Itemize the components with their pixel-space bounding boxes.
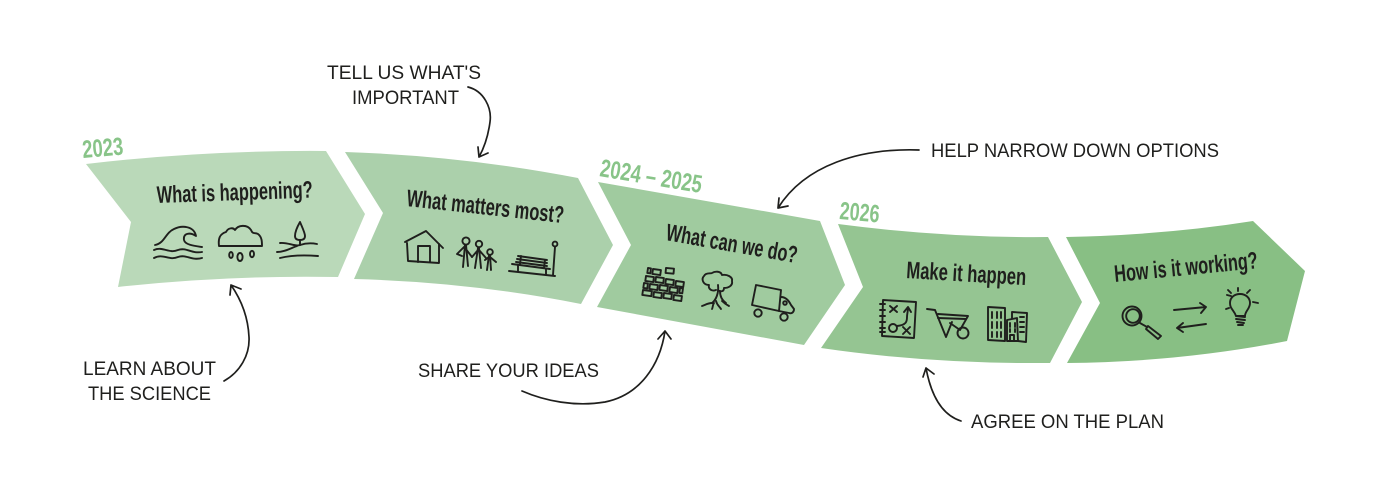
heading: what matters most: What matters most? [405,185,565,229]
year 2026: 2026 [838,197,881,228]
heading: what can we do: What can we do? [664,219,800,269]
icon: exchange arrows [1174,303,1206,332]
callout: tell us what's important [327,63,490,157]
panel: make it happen [821,197,1082,363]
panel shape 3 [597,182,845,345]
icon: plan notebook [880,300,916,338]
icon: rain cloud [219,226,262,261]
year 2023: 2023 [81,133,124,164]
callout: learn about the science: LEARN ABOUT [83,359,216,380]
icon: magnifying glass [1122,306,1161,339]
icon: wave [154,227,202,259]
callout: share your ideas [418,331,671,404]
icon: tree on land [277,222,318,258]
panel shape 1 [86,151,365,287]
icon: brick wall [642,268,684,301]
callout: help narrow down options [778,141,1219,208]
callout: tell us what's important: IMPORTANT [352,88,459,109]
icon: tree [702,272,732,309]
icon: house [405,231,443,263]
panel shape 4 [821,224,1082,363]
callout: tell us what's important: TELL US WHAT'S [327,63,481,84]
callout: agree on the plan [923,368,1164,433]
panel shape 5 [1066,221,1305,363]
panel: what matters most [345,152,613,304]
callout: learn about the science [83,285,249,405]
callout: share your ideas: SHARE YOUR IDEAS [418,361,599,382]
callout: help narrow down options: HELP NARROW DOWN OPTIONS [931,141,1219,162]
icon: wheelbarrow [927,309,968,338]
icon: truck [752,285,794,321]
panel: what is happening [81,133,365,287]
panel: what can we do [597,154,845,345]
icon: buildings [988,307,1027,342]
heading: how is it working: How is it working? [1113,247,1259,288]
year 2024-2025: 2024 – 2025 [598,154,704,199]
callout: agree on the plan: AGREE ON THE PLAN [971,412,1164,433]
icon: lightbulb [1226,288,1258,325]
heading: make it happen: Make it happen [906,257,1027,291]
icon: family [457,237,496,270]
panel shape 2 [345,152,613,304]
heading: what is happening: What is happening? [156,177,313,209]
icon: park bench and lamp [509,242,557,276]
callout: learn about the science: THE SCIENCE [88,384,211,405]
panel: how is it working [1066,221,1305,363]
